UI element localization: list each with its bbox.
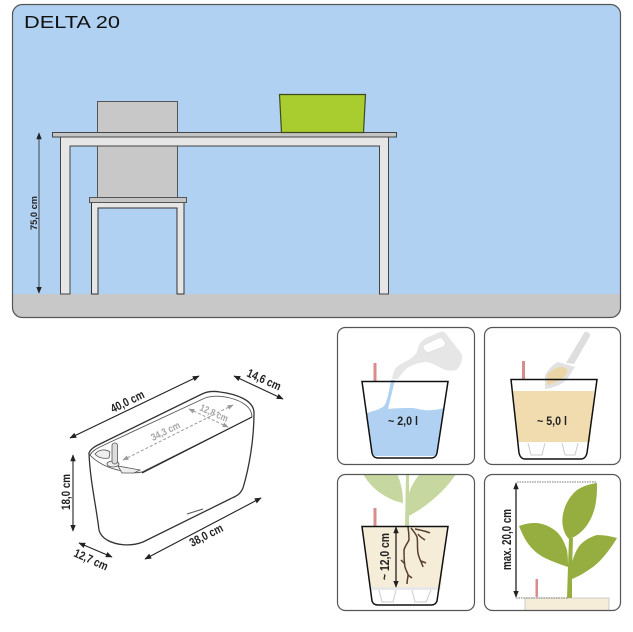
dimension: root depth <box>395 527 397 587</box>
pot outline <box>362 526 448 605</box>
panel: plant height: max. 20,0 cm <box>500 509 514 570</box>
plant <box>519 483 617 598</box>
icon: trowel <box>545 332 590 389</box>
table <box>52 132 396 294</box>
planter technical drawing: 38,0 cm <box>187 521 225 550</box>
water indicator <box>374 508 376 527</box>
logo <box>187 509 203 514</box>
water indicator <box>374 363 376 382</box>
soil <box>513 391 594 442</box>
water level <box>367 380 444 456</box>
planter technical drawing: 12,8 cm <box>198 403 230 425</box>
soil <box>525 598 609 612</box>
planter technical drawing <box>59 366 283 573</box>
soil <box>363 527 447 587</box>
dimension: table height: 75,0 cm <box>29 196 39 230</box>
chair <box>90 102 186 294</box>
planter technical drawing: 12,7 cm <box>72 546 110 573</box>
reservoir <box>528 443 578 455</box>
water indicator <box>522 361 525 380</box>
panel: water fill <box>338 328 474 464</box>
heading: DELTA 20: DELTA 20 <box>24 12 120 32</box>
panel: root depth <box>338 474 474 610</box>
panel: water fill: ~ 2,0 l <box>388 414 418 428</box>
inner dimensions <box>123 405 233 460</box>
planter on table <box>280 94 366 132</box>
planter technical drawing: 40,0 cm <box>108 387 147 416</box>
water filler and indicator <box>95 443 140 473</box>
height limit lines <box>516 482 597 598</box>
panel: room scene <box>12 4 621 318</box>
reservoir <box>379 590 431 602</box>
pot outline <box>362 382 448 458</box>
water indicator <box>536 579 538 597</box>
plant leaves <box>363 474 456 517</box>
panel: plant height <box>484 474 620 612</box>
icon: watering can <box>392 332 462 379</box>
panel: soil fill <box>484 328 620 464</box>
panel: soil fill: ~ 5,0 l <box>537 414 567 428</box>
planter technical drawing: 18,0 cm <box>59 474 73 510</box>
inner rim <box>90 396 252 473</box>
pot outline <box>511 380 597 459</box>
outer dimensions <box>70 376 283 559</box>
dimension: plant height <box>515 483 517 597</box>
planter technical drawing: 34,3 cm <box>149 420 182 444</box>
planter technical drawing: 14,6 cm <box>245 366 283 393</box>
roots <box>401 527 430 584</box>
panel: root depth: ~ 12,0 cm <box>377 533 392 580</box>
